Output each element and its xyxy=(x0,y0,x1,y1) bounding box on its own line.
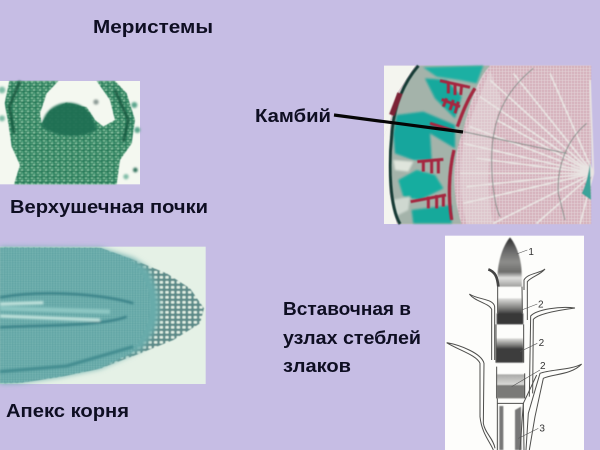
arrow: cambium pointer line xyxy=(334,115,463,132)
label: intercalary meristem: узлах стеблей xyxy=(283,328,421,348)
label: intercalary meristem xyxy=(283,299,421,376)
diagram numbers: 2 xyxy=(538,299,544,310)
diagram numbers: 3 xyxy=(539,424,545,435)
diagram numbers: 1 xyxy=(528,247,534,258)
micrograph: stem cross-section with cambium xyxy=(384,66,593,224)
diagram numbers: 2 xyxy=(540,361,546,372)
micrograph: root apex xyxy=(0,247,206,384)
diagram: cereal stem nodes xyxy=(445,236,584,450)
title: Меристемы xyxy=(93,17,213,37)
leader lines xyxy=(512,250,540,438)
label: apical bud: Верхушечная почки xyxy=(10,197,208,217)
diagram numbers xyxy=(528,247,546,435)
corner of slide xyxy=(384,66,415,137)
diagram numbers: 2 xyxy=(539,338,545,349)
label: root apex: Апекс корня xyxy=(6,401,129,421)
micrograph: apical bud xyxy=(0,81,140,184)
label: intercalary meristem: злаков xyxy=(283,356,351,376)
label: intercalary meristem: Вставочная в xyxy=(283,299,411,319)
label: cambium: Камбий xyxy=(255,106,331,126)
